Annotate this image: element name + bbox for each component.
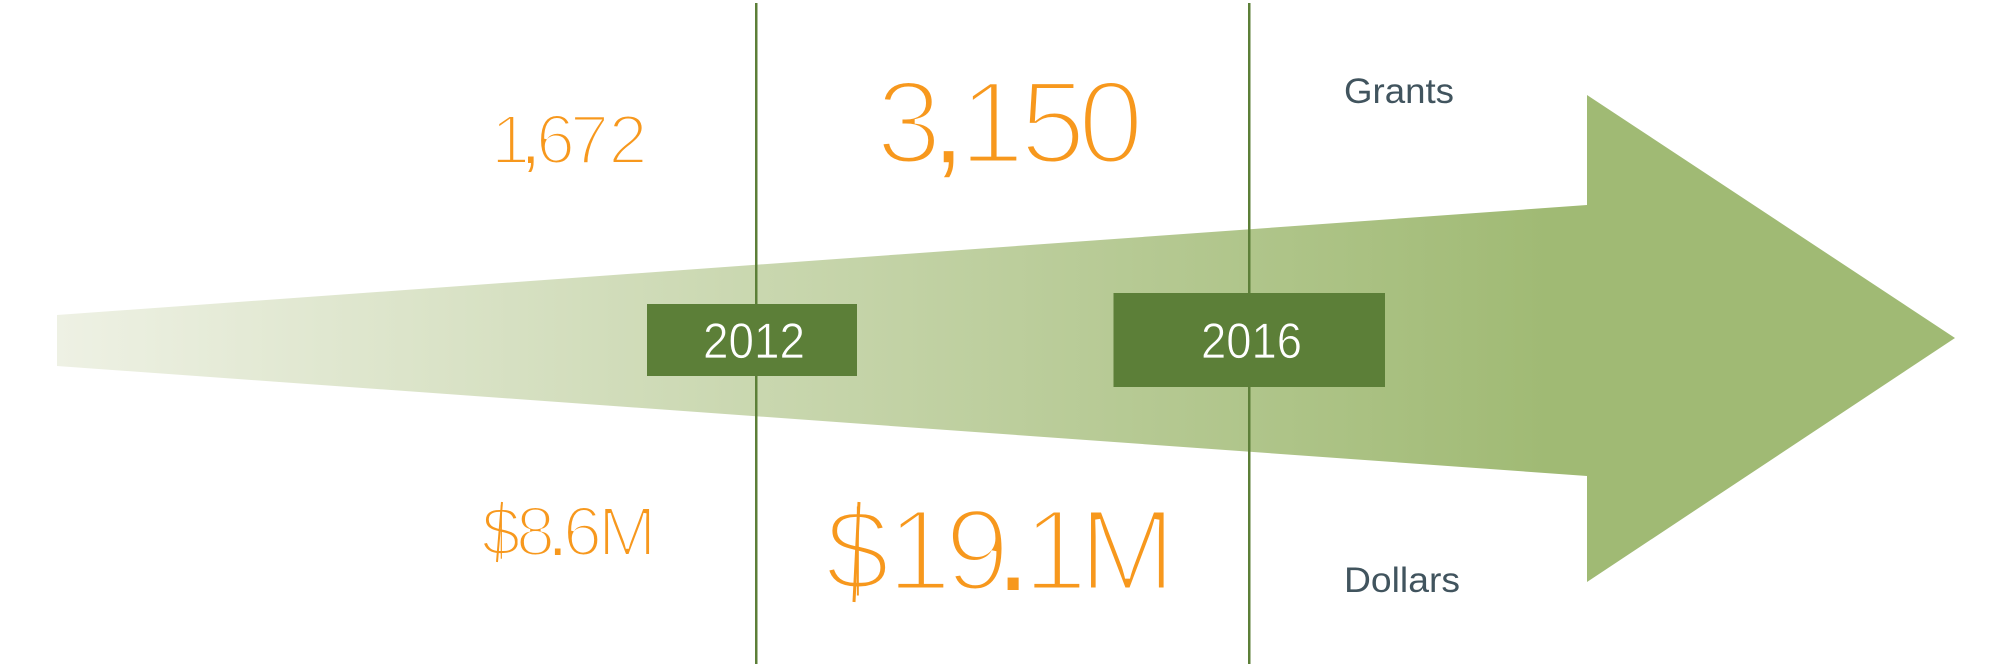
year box: 2012: [647, 304, 857, 376]
growth arrow: [57, 95, 1955, 582]
vertical line: 2016: [1248, 3, 1250, 664]
dollars 2012 value: $8.6M: [482, 492, 656, 570]
year box: 2016: 2016: [1201, 313, 1302, 369]
dollars 2016 value: $19.1M: [825, 485, 1176, 615]
grants 2016 value: 3,150: [876, 57, 1144, 189]
label: dollars: Dollars: [1344, 561, 1460, 600]
vertical line: 2012: [755, 3, 758, 664]
grants 2012 value: 1,672: [491, 100, 647, 178]
year box: 2016: [1114, 293, 1385, 387]
label: grants: Grants: [1344, 72, 1454, 111]
year box: 2012: 2012: [703, 313, 805, 369]
